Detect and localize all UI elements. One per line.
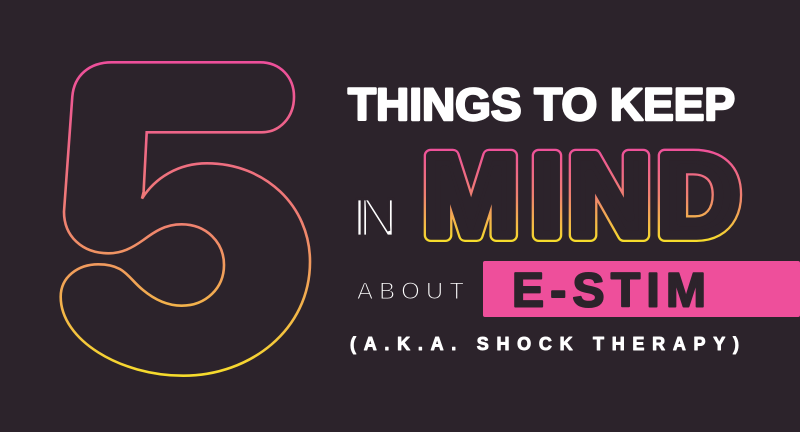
word: in: IN bbox=[352, 188, 398, 248]
highlight bar bbox=[483, 261, 800, 317]
subtitle: a.k.a. shock therapy: (A.K.A. SHOCK THERAPY) bbox=[350, 334, 739, 354]
heading: things to keep: THINGS TO KEEP bbox=[348, 79, 735, 130]
big outlined number 5 bbox=[61, 62, 310, 376]
word: mind outlined: MIND bbox=[423, 132, 740, 260]
label: e-stim: E-STIM bbox=[512, 264, 706, 318]
word: about: ABOUT bbox=[357, 278, 464, 305]
word: mind outlined: MIND bbox=[423, 132, 740, 260]
